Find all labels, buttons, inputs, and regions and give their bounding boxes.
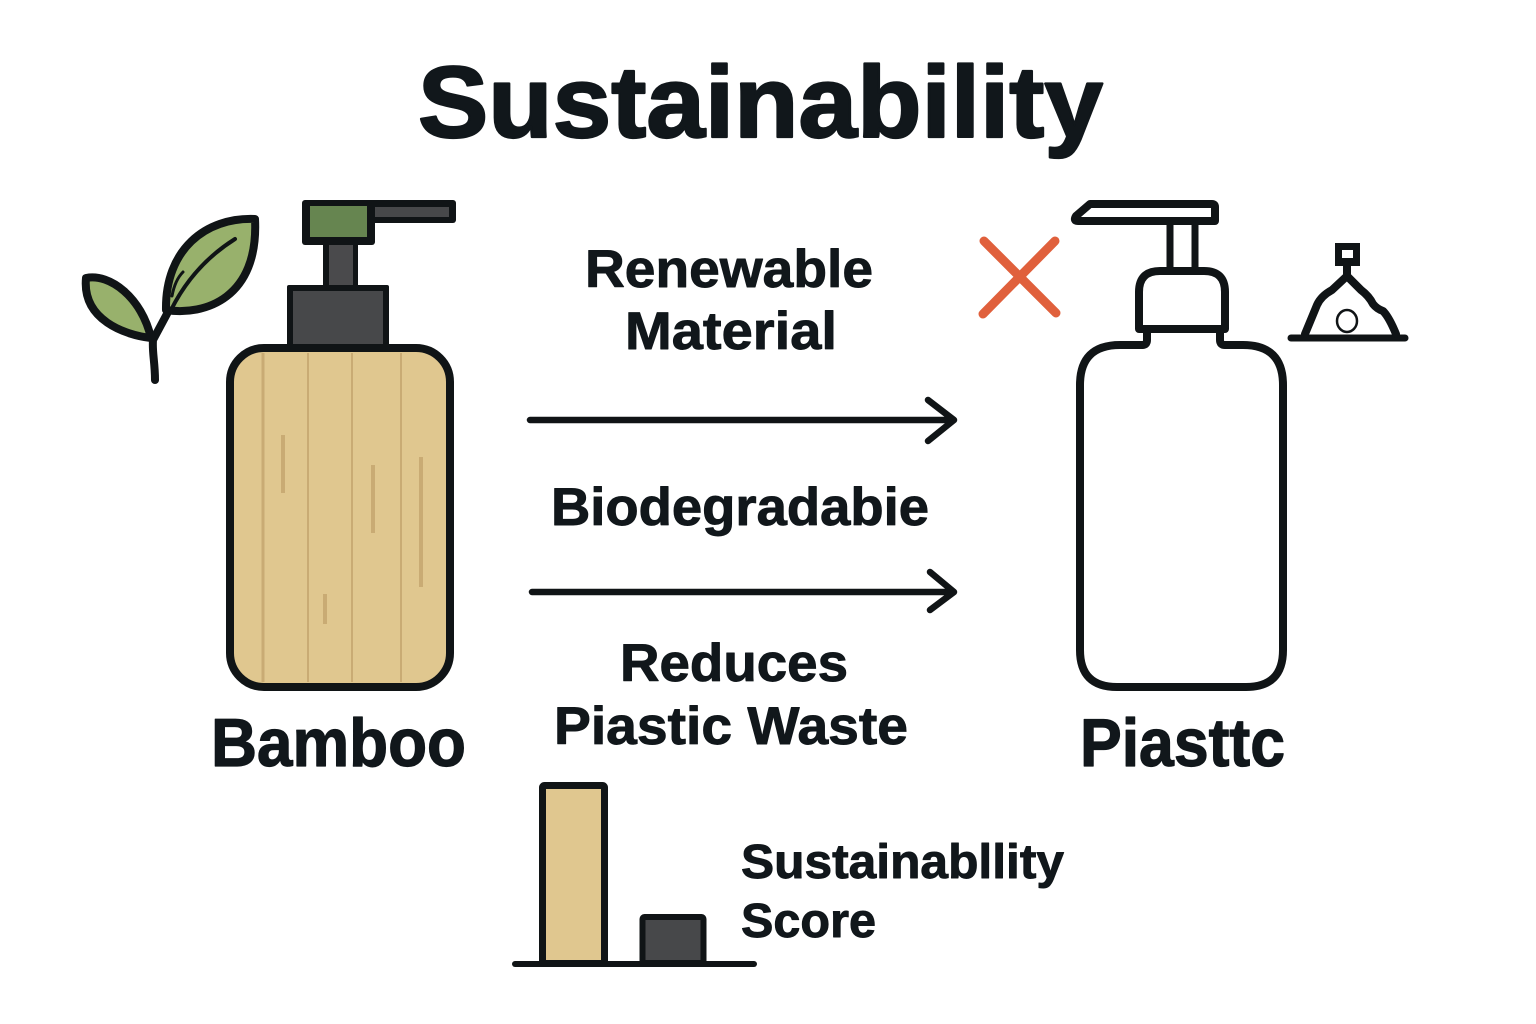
label: Reduces Piastic Waste: Reduces [620,634,848,693]
bamboo bottle pump head [302,200,375,245]
label: Sustainabllity Score: Sustainabllity [741,836,1064,889]
label: Renewable Material [585,240,873,361]
label: Piasttc: Piasttc [1080,705,1285,781]
title: Sustainability [418,47,1103,159]
label: Reduces Piastic Waste [554,634,908,756]
label: Sustainabllity Score: Score [741,895,876,948]
plastic bottle body [1080,332,1283,687]
baseline [515,961,754,967]
bamboo pump bottle [230,200,456,687]
landfill mound [1305,276,1396,334]
label: Reduces Piastic Waste: Piastic Waste [554,697,908,756]
landfill circle [1337,310,1357,332]
plastic bottle stem [1170,225,1195,268]
bar chart: sustainability score [515,786,754,964]
bamboo bottle body [230,348,450,687]
bar: bamboo [542,786,604,964]
icon: landfill [1291,243,1405,338]
bamboo bottle collar [287,285,389,349]
label: Biodegradabie: Biodegradabie [551,478,929,537]
arrow: biodegradable [532,572,954,610]
arrow: renewable [530,400,954,441]
bamboo bottle nozzle [360,200,456,223]
landfill top box [1335,243,1360,266]
icon: red cross [983,241,1056,314]
landfill base [1291,334,1405,342]
bamboo bottle neck [323,244,358,288]
bamboo grain lines [263,353,421,682]
plastic pump bottle [1075,204,1283,687]
label: Sustainabllity Score [741,836,1064,948]
plastic bottle cap [1139,271,1225,329]
label: Bamboo: Bamboo [211,705,466,781]
label: Renewable Material: Renewable [585,240,873,299]
plastic bottle pump head [1075,204,1215,221]
icon: leaf sprout [86,219,255,380]
label: Renewable Material: Material [625,302,837,361]
bar: plastic [642,917,704,963]
